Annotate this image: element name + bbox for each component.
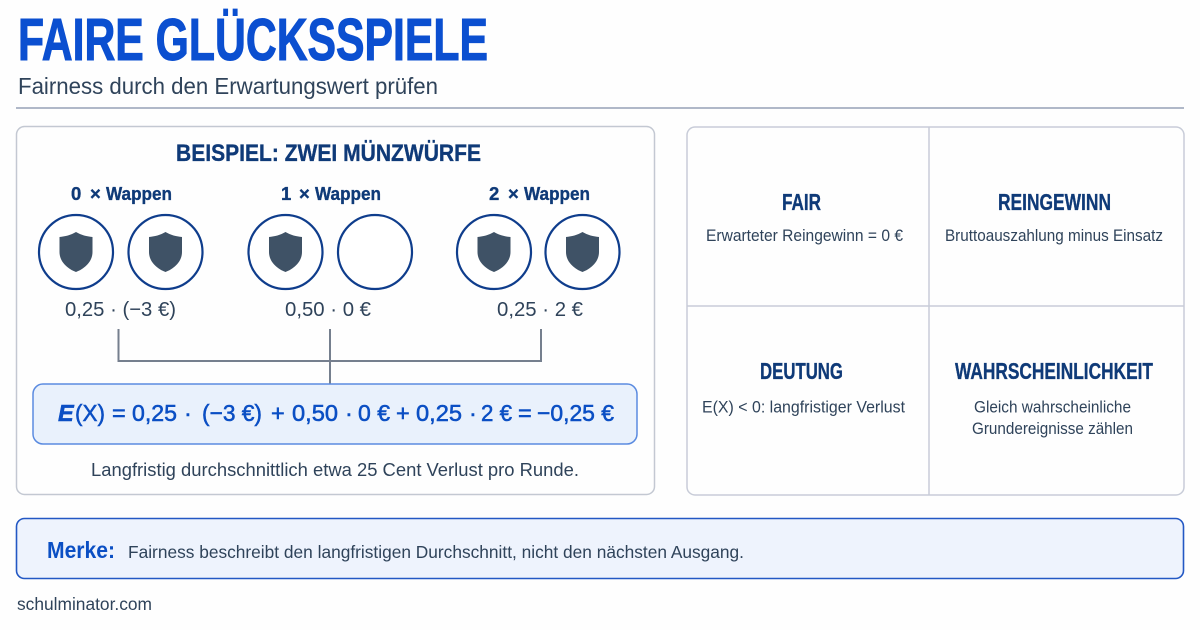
coin with shield [457, 215, 531, 289]
card: deutung [702, 358, 905, 416]
panel: example two coin tosses [16, 126, 654, 494]
bracket connector [118, 329, 541, 384]
panel: key terms [687, 127, 1184, 495]
term: 0,25 · 2 € [497, 298, 584, 321]
outcome: 0 x Wappen: Wappen [106, 183, 172, 204]
term: 0,25 · (−3 €) [65, 298, 176, 321]
outcome: 0 x Wappen: 0 [71, 183, 81, 204]
title: FAIRE GLÜCKSSPIELE [18, 7, 488, 73]
outcome: 1 x Wappen: × [299, 183, 310, 204]
formula: + [396, 400, 410, 426]
outcome: 1 x Wappen: 1 [281, 183, 291, 204]
card: reingewinn: REINGEWINN [998, 189, 1111, 215]
outcome: 2 x Wappen: 2 [489, 183, 499, 204]
coin with shield [39, 215, 113, 289]
outcome: 2 x Wappen: × [508, 183, 519, 204]
formula [58, 400, 614, 426]
card: wahrscheinlichkeit: Gleich wahrscheinliche [974, 398, 1131, 416]
formula: 0,25 [132, 400, 177, 426]
formula: E [58, 400, 75, 426]
callout label: Merke: [47, 537, 115, 563]
formula: 2 € [481, 400, 512, 426]
conclusion: Langfristig durchschnittlich etwa 25 Cent Verlust pro Runde. [91, 459, 579, 480]
formula: = [518, 400, 532, 426]
empty coin [338, 215, 412, 289]
formula: −0,25 € [537, 400, 614, 426]
card: reingewinn: Bruttoauszahlung minus Einsatz [945, 227, 1163, 245]
card: deutung: E(X) < 0: langfristiger Verlust [702, 398, 905, 416]
formula: = [112, 400, 126, 426]
card: reingewinn [945, 189, 1163, 245]
formula: 0,25 [416, 400, 462, 426]
formula: 0,50 [292, 400, 338, 426]
outcome: 2 x Wappen: Wappen [524, 183, 590, 204]
card: wahrscheinlichkeit: Grundereignisse zählen [972, 420, 1133, 438]
outcome: 0 x Wappen [39, 183, 202, 321]
card: fair: FAIR [782, 189, 821, 215]
formula box [33, 384, 637, 444]
formula: 0 € [358, 400, 390, 426]
outcome: 1 x Wappen [248, 183, 412, 321]
formula: (X) [75, 400, 105, 426]
term: 0,50 · 0 € [285, 298, 372, 321]
card: fair: Erwarteter Reingewinn = 0 € [706, 227, 903, 245]
formula: + [271, 400, 285, 426]
outcome: 2 x Wappen [457, 183, 620, 321]
formula: (−3 €) [202, 400, 262, 426]
callout: merke [16, 518, 1184, 578]
coin with shield [248, 215, 322, 289]
formula: · [184, 400, 192, 426]
card: fair [706, 189, 903, 245]
panel heading: BEISPIEL: ZWEI MÜNZWÜRFE [176, 140, 481, 167]
callout text: Fairness beschreibt den langfristigen Durchschnitt, nicht den nächsten Ausgang. [128, 542, 744, 562]
coin with shield [128, 215, 202, 289]
card: deutung: DEUTUNG [760, 358, 843, 384]
formula: · [469, 400, 477, 426]
formula: · [345, 400, 353, 426]
coin with shield [546, 215, 620, 289]
outcome: 1 x Wappen: Wappen [315, 183, 381, 204]
subtitle: Fairness durch den Erwartungswert prüfen [18, 73, 438, 99]
outcome: 0 x Wappen: × [90, 183, 101, 204]
footer: schulminator.com [17, 594, 152, 614]
card: wahrscheinlichkeit [955, 358, 1153, 438]
